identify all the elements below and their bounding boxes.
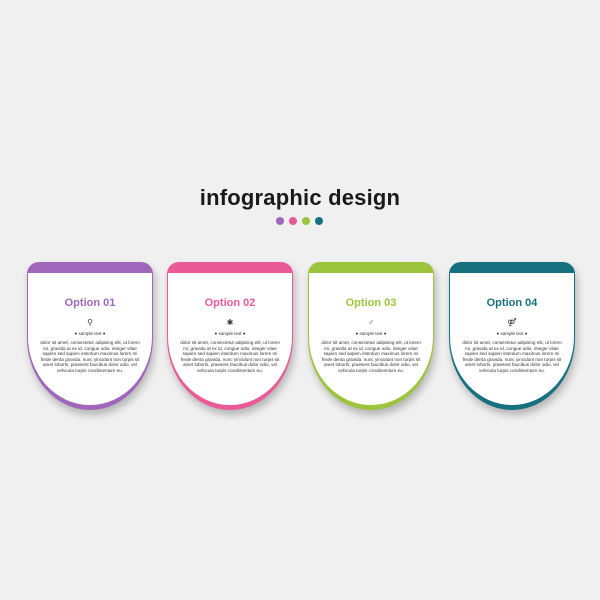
panel: option 01 bbox=[27, 262, 153, 410]
dots bbox=[276, 217, 323, 225]
text block: dolor sit amet, consectetur adipising elit, ut lorem mi, gravida at ex id, congue odio. integer vitae sapien sed sapien interdum maximus lorem mi frede denta gravida. nunc yincidunt non turpis sit amet loborts, praesent faucibus dolor odio, vel vehicula turpis condimentum eu. bbox=[321, 340, 421, 372]
icon: ⚲ bbox=[87, 318, 93, 327]
panel: option 02 bbox=[167, 262, 293, 410]
text block: dolor sit amet, consectetur adipising elit, ut lorem mi, gravida at ex id, congue odio. integer vitae sapien sed sapien interdum maximus lorem mi frede denta gravida. nunc yincidunt non turpis sit amet loborts, praesent faucibus dolor odio, vel vehicula turpis condimentum eu. bbox=[462, 340, 562, 372]
icon: ⚤ bbox=[507, 318, 517, 327]
title: infographic design bbox=[200, 185, 400, 210]
panel: option 04 bbox=[449, 262, 575, 410]
text block: dolor sit amet, consectetur adipising elit, ut lorem mi, gravida at ex id, congue odio. integer vitae sapien sed sapien interdum maximus lorem mi frede denta gravida. nunc yincidunt non turpis sit amet loborts, praesent faucibus dolor odio, vel vehicula turpis condimentum eu. bbox=[180, 340, 280, 372]
icon: ✱ bbox=[227, 318, 233, 327]
panel: option 01: ● sample text ● bbox=[75, 331, 105, 336]
text block: dolor sit amet, consectetur adipising elit, ut lorem mi, gravida at ex id, congue odio. integer vitae sapien sed sapien interdum maximus lorem mi frede denta gravida. nunc yincidunt non turpis sit amet loborts, praesent faucibus dolor odio, vel vehicula turpis condimentum eu. bbox=[40, 340, 140, 372]
panel: option 03: ● sample text ● bbox=[356, 331, 386, 336]
heading: option 04: Option 04 bbox=[487, 297, 537, 309]
panel: option 03 bbox=[308, 262, 434, 410]
panel: option 04: ● sample text ● bbox=[497, 331, 527, 336]
heading: option 03: Option 03 bbox=[346, 297, 396, 309]
heading: option 02: Option 02 bbox=[205, 297, 255, 309]
panel: option 02: ● sample text ● bbox=[215, 331, 245, 336]
heading: option 01: Option 01 bbox=[65, 297, 115, 309]
icon: ♂ bbox=[368, 318, 374, 327]
